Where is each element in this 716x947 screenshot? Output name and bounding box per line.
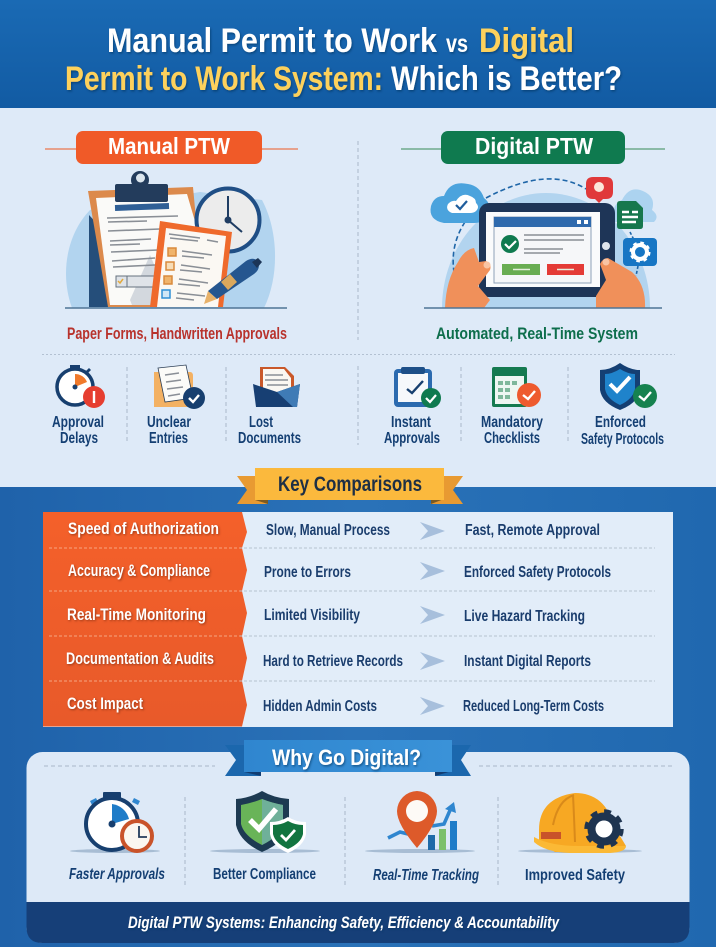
label: entries: Entries — [149, 430, 188, 447]
label: approvals: Approvals — [384, 430, 440, 447]
row: cost impact: Reduced Long-Term Costs — [463, 698, 604, 715]
icon: unclear entries — [154, 365, 205, 409]
label: enforced: Enforced — [595, 414, 646, 431]
icon row: digital PTW benefits — [384, 363, 664, 448]
row: accuracy and compliance — [68, 561, 611, 581]
label: lost: Lost — [249, 414, 273, 431]
panel: why go digital — [26, 752, 690, 943]
title: Manual Permit to Work — [107, 22, 437, 60]
row: accuracy and compliance: Accuracy & Compliance — [68, 561, 210, 580]
heading: digital PTW: Digital PTW — [475, 133, 593, 159]
pen — [204, 258, 262, 304]
label: mandatory: Mandatory — [481, 414, 543, 431]
icon: real-time tracking — [365, 791, 475, 853]
row: real-time monitoring: Limited Visibility — [264, 607, 360, 624]
center divider — [357, 141, 359, 445]
heading: digital PTW — [401, 131, 665, 164]
label: real-time tracking: Real-Time Tracking — [373, 867, 479, 884]
ribbon: why go digital: Why Go Digital? — [272, 745, 421, 770]
gear badge — [623, 238, 657, 266]
panel: digital PTW — [401, 131, 665, 343]
comparison table — [43, 512, 673, 727]
label: delays: Delays — [60, 430, 98, 447]
icon: instant approvals — [394, 367, 441, 408]
document badge — [617, 201, 643, 229]
hands — [445, 248, 645, 308]
clock — [196, 188, 260, 252]
row: documentation and audits: Hard to Retrieve Records — [263, 653, 403, 670]
ribbon: why go digital — [225, 740, 471, 776]
label: documents: Documents — [238, 430, 301, 447]
heading: manual PTW — [45, 131, 298, 164]
row: speed of authorization — [68, 519, 600, 540]
row: speed of authorization: Fast, Remote Approval — [465, 522, 600, 539]
title: Permit to Work System: — [65, 60, 383, 98]
title: vs — [446, 30, 468, 58]
row: real-time monitoring: Real-Time Monitoring — [67, 605, 206, 624]
icon: enforced safety protocols — [600, 363, 657, 410]
icon row: manual PTW problems — [52, 365, 301, 447]
ribbon: key comparisons — [237, 468, 463, 504]
label: approval: Approval — [52, 414, 104, 431]
label: safety protocols: Safety Protocols — [581, 431, 664, 448]
header banner — [0, 0, 716, 108]
row: documentation and audits — [66, 649, 591, 670]
row: cost impact: Hidden Admin Costs — [263, 698, 377, 715]
ribbon: key comparisons: Key Comparisons — [278, 473, 422, 496]
label: checklists: Checklists — [484, 430, 540, 447]
orange criteria column — [43, 512, 247, 726]
row: real-time monitoring — [67, 605, 585, 625]
label: unclear: Unclear — [147, 414, 191, 431]
label: faster approvals: Faster Approvals — [69, 866, 165, 883]
location pin badge — [586, 177, 613, 203]
title — [65, 22, 622, 98]
icon: faster approvals — [70, 792, 160, 853]
cloud with check — [431, 183, 489, 223]
label: improved safety: Improved Safety — [525, 867, 625, 884]
row: speed of authorization: Speed of Authorization — [68, 519, 219, 538]
footer tagline: Digital PTW Systems: Enhancing Safety, Efficiency & Accountability — [128, 914, 560, 932]
illustration: tablet with hands and cloud services — [424, 177, 662, 308]
icon: improved safety — [518, 793, 642, 853]
row: cost impact: Cost Impact — [67, 694, 143, 713]
icon: approval delays — [57, 365, 105, 408]
icon: lost documents — [253, 367, 300, 407]
label: instant: Instant — [391, 414, 432, 431]
title: Digital — [479, 22, 574, 60]
caption: digital PTW: Automated, Real-Time System — [436, 324, 638, 343]
row: speed of authorization: Slow, Manual Process — [266, 522, 390, 539]
caption: manual PTW: Paper Forms, Handwritten Approvals — [67, 324, 287, 343]
row: real-time monitoring: Live Hazard Tracking — [464, 608, 585, 625]
illustration: clipboard, form, clock and pen — [65, 171, 287, 308]
checklist form — [150, 221, 232, 307]
row: documentation and audits: Documentation & Audits — [66, 649, 214, 668]
label: better compliance: Better Compliance — [213, 866, 316, 883]
panel: manual PTW — [45, 131, 298, 343]
icon: better compliance — [210, 791, 320, 853]
heading: manual PTW: Manual PTW — [108, 133, 230, 159]
tablet — [479, 203, 615, 297]
row: accuracy and compliance: Prone to Errors — [264, 564, 351, 581]
title: Which is Better? — [391, 60, 622, 98]
icon: mandatory checklists — [492, 367, 541, 407]
row: documentation and audits: Instant Digital Reports — [464, 653, 591, 670]
row: accuracy and compliance: Enforced Safety Protocols — [464, 564, 611, 581]
row: cost impact — [67, 694, 604, 715]
